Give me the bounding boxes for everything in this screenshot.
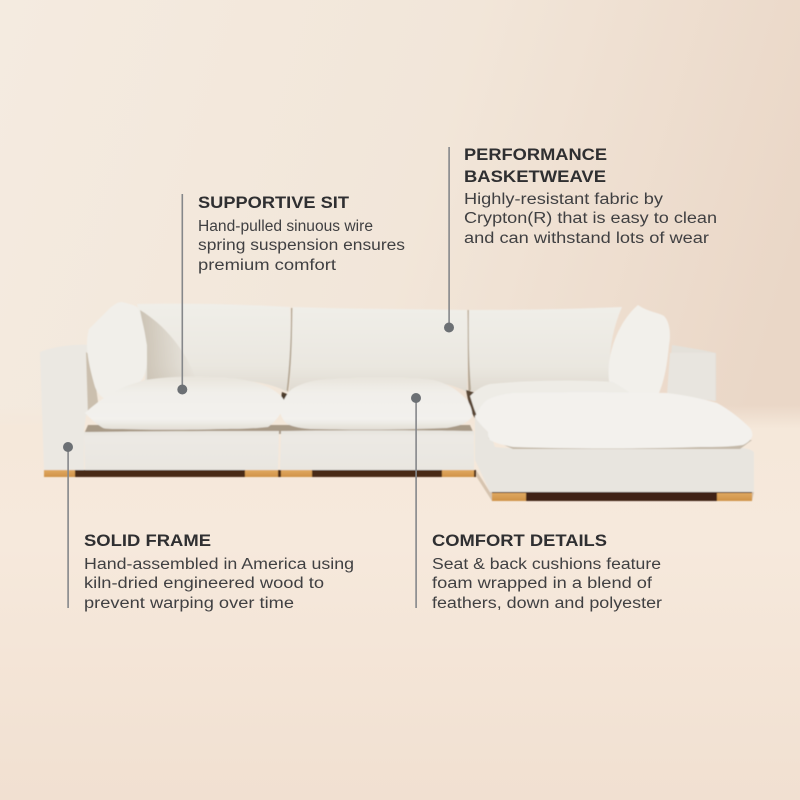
chaise base (475, 415, 754, 492)
body text: prevent warping over time (84, 595, 294, 612)
callout: supportive sit (177, 193, 405, 394)
seat cushion: left (85, 376, 284, 430)
arm: right (667, 345, 716, 401)
arm inner shade (86, 352, 98, 416)
shadow behind left pillow (140, 310, 196, 382)
heading: PERFORMANCE (464, 145, 607, 164)
body text: and can withstand lots of wear (464, 230, 709, 247)
dark gap under main sofa with feet (44, 470, 476, 477)
chaise cushion underside shade (488, 438, 752, 449)
body text: feathers, down and polyester (432, 595, 662, 612)
seat cushion: right back (470, 381, 632, 418)
callout: comfort details (411, 393, 662, 612)
pillow: right (609, 305, 670, 394)
leader line and dot (63, 442, 73, 608)
body text (432, 556, 662, 612)
shadow strip under seats (84, 425, 474, 434)
chaise cushion (475, 392, 752, 448)
gaps between cushions (280, 308, 480, 420)
heading: COMFORT DETAILS (432, 531, 607, 550)
heading: SOLID FRAME (84, 531, 211, 550)
arm: left (40, 345, 95, 470)
back cushion: center (289, 307, 468, 392)
body text: premium comfort (198, 257, 337, 274)
body text: kiln-dried engineered wood to (84, 575, 324, 592)
leader line and dot (444, 147, 454, 332)
base: left section (84, 431, 279, 470)
leader line and dot (177, 194, 187, 394)
callout: performance basketweave (444, 145, 717, 332)
back cushion: left (137, 304, 291, 392)
body text: Crypton(R) that is easy to clean (464, 210, 717, 227)
seat cushion: center (280, 377, 472, 430)
callout: solid frame (63, 442, 354, 612)
body text (84, 556, 354, 612)
heading (464, 145, 607, 186)
body text: Hand-assembled in America using (84, 556, 354, 573)
heading: BASKETWEAVE (464, 167, 606, 186)
heading: SUPPORTIVE SIT (198, 193, 350, 212)
body text: foam wrapped in a blend of (432, 575, 653, 592)
floor shadow under sofa (44, 470, 754, 501)
chaise feet (492, 492, 752, 501)
sofa illustration (40, 302, 754, 501)
body text: Highly-resistant fabric by (464, 191, 663, 208)
body text (464, 191, 717, 247)
pillow: left (87, 302, 147, 400)
base: center section (280, 430, 474, 470)
body text (198, 218, 405, 274)
body text: Seat & back cushions feature (432, 556, 661, 573)
body text: spring suspension ensures (198, 237, 405, 254)
back cushion: right (468, 307, 622, 392)
body text: Hand-pulled sinuous wire (198, 218, 373, 235)
leader line and dot (411, 393, 421, 608)
